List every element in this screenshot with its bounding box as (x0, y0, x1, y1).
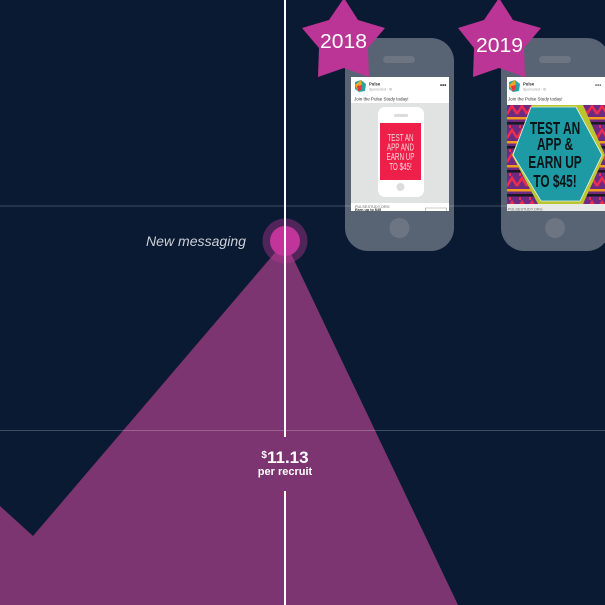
ad screenshot: 2018: Sponsored · ⚙ (369, 88, 393, 92)
ad screenshot: 2018: Pulse (369, 82, 381, 86)
marker: new messaging (262, 218, 308, 264)
star badge: 2018: 2018 (320, 31, 367, 53)
ad screenshot: 2018: ••• (440, 83, 446, 89)
ad screenshot: 2019: APP & (537, 135, 573, 155)
ad screenshot: 2019: PULSESTUDY.ORG (508, 208, 543, 212)
ad screenshot: 2018: TEST AN (387, 131, 414, 143)
ad screenshot: 2019: ••• (595, 83, 601, 89)
ad screenshot: 2019: TO $45! (533, 172, 577, 192)
ad screenshot: 2019: TEST AN (530, 119, 580, 139)
area chart: cost per recruit (0, 241, 458, 605)
timeline vertical line (284, 0, 286, 605)
phone: 2019 ad (501, 38, 605, 251)
callout: cost per recruit: $ (261, 450, 267, 461)
ad screenshot: 2018: Earn up to $45 (355, 208, 381, 212)
ad screenshot: 2019: Pulse (523, 82, 535, 86)
ad screenshot: 2018: EARN UP (387, 150, 415, 162)
callout: cost per recruit: per recruit (258, 466, 313, 478)
label: new messaging: New messaging (146, 233, 246, 249)
ad screenshot: 2018: TO $45! (389, 160, 412, 172)
star badge: 2018 (302, 0, 385, 77)
ad screenshot: 2019: EARN UP (528, 153, 582, 173)
ad screenshot: 2018: APP AND (387, 141, 414, 153)
callout: cost per recruit: 11.13 (267, 448, 309, 467)
star badge: 2019: 2019 (476, 35, 523, 57)
ad screenshot: 2019 (507, 77, 605, 212)
ad screenshot: 2019: Join the Pulse Study today! (508, 96, 563, 102)
ad screenshot: 2018: Join the Pulse Study today! (354, 96, 409, 102)
upper gridline (0, 205, 605, 207)
ad screenshot: 2019: Sponsored · ⚙ (523, 88, 547, 92)
callout: cost per recruit (258, 448, 313, 478)
ad screenshot: 2018 (351, 77, 449, 212)
phone: 2018 ad (345, 38, 454, 251)
star badge: 2019 (458, 0, 541, 77)
ad screenshot: 2018: PULSESTUDY.ORG (355, 205, 390, 209)
lower gridline (0, 430, 605, 432)
